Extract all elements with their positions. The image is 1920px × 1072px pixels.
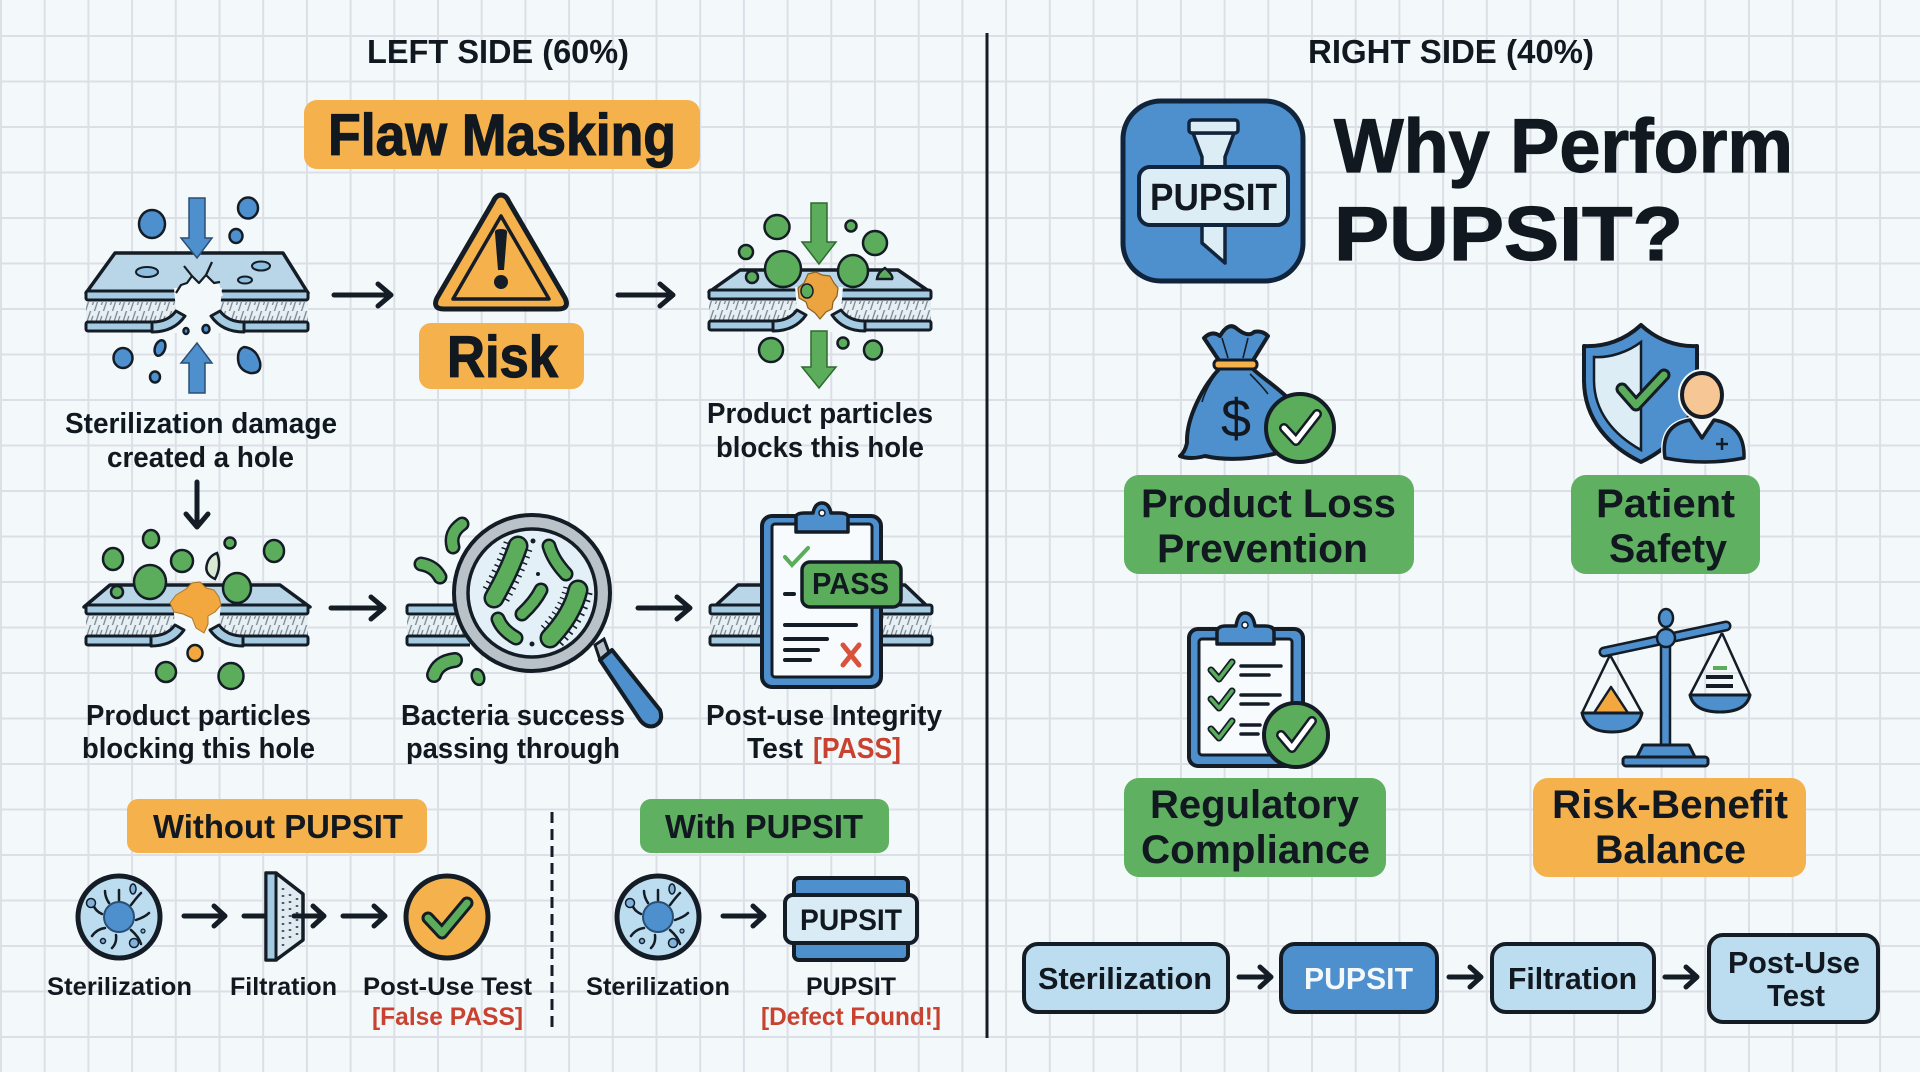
heading: left side: LEFT SIDE (60%)	[367, 33, 629, 70]
arrow: to magnifier	[331, 597, 384, 619]
arrow	[343, 906, 385, 926]
arrow: to risk	[334, 284, 391, 306]
icon: sterilization	[617, 876, 699, 958]
icon: magnifier with bacteria	[407, 515, 661, 726]
badge: With PUPSIT: With PUPSIT	[665, 808, 863, 845]
icon: compliance clipboard	[1189, 613, 1328, 767]
step: PUPSIT: PUPSIT	[1304, 961, 1413, 996]
label: product particles blocks	[707, 398, 933, 464]
arrow	[1665, 967, 1697, 987]
badge: Risk-Benefit Balance: Balance	[1595, 828, 1746, 872]
icon: warning triangle	[436, 195, 566, 309]
label: sterilization: Sterilization	[47, 973, 192, 1001]
icon: clipboard with PASS stamp	[710, 503, 932, 687]
step: PUPSIT	[1281, 944, 1437, 1012]
vertical divider	[986, 33, 988, 1038]
badge: Regulatory Compliance: Compliance	[1141, 828, 1370, 872]
label: product particles blocking	[82, 700, 315, 765]
badge: Regulatory Compliance: Regulatory	[1150, 783, 1360, 827]
panel: with PUPSIT	[586, 799, 941, 1031]
label: filtration: Filtration	[230, 973, 337, 1001]
dashed divider	[550, 812, 554, 1028]
title: Why Perform	[1334, 104, 1793, 189]
label: PUPSIT: PUPSIT	[806, 973, 896, 1001]
label: product particles blocking: Product particles	[86, 700, 311, 732]
step: filtration	[1492, 944, 1654, 1012]
panel: flaw masking	[65, 100, 942, 765]
icon: PUPSIT filter	[785, 878, 917, 960]
badge: Without PUPSIT: Without PUPSIT	[153, 808, 403, 845]
label: sterilization damage: Sterilization damage	[65, 408, 337, 440]
heading: right side: RIGHT SIDE (40%)	[1308, 33, 1594, 70]
title: PUPSIT?	[1334, 192, 1683, 277]
panel: without PUPSIT	[47, 799, 533, 1031]
badge: Risk: Risk	[447, 325, 559, 390]
badge: Risk-Benefit Balance	[1533, 778, 1806, 877]
label: sterilization: Sterilization	[586, 973, 730, 1001]
step: sterilization	[1024, 944, 1228, 1012]
flow: process sequence	[1024, 935, 1878, 1022]
badge: Risk-Benefit Balance: Risk-Benefit	[1552, 783, 1788, 827]
icon: particles blocking hole	[84, 530, 310, 689]
arrow	[1239, 967, 1271, 987]
badge: Product Loss Prevention: Prevention	[1157, 527, 1368, 571]
badge: With PUPSIT	[640, 799, 889, 853]
label: false pass: [False PASS]	[372, 1003, 523, 1031]
arrow: to test	[638, 597, 690, 619]
icon: balance scale	[1582, 609, 1750, 766]
arrow	[723, 906, 764, 926]
step: post-use test: Test	[1767, 978, 1825, 1013]
step: sterilization: Sterilization	[1038, 961, 1212, 996]
badge: Product Loss Prevention: Product Loss	[1141, 482, 1396, 526]
icon: PUPSIT nail badge	[1123, 101, 1303, 281]
arrow	[1449, 967, 1481, 987]
icon: false pass check	[406, 876, 488, 958]
badge: Patient Safety	[1571, 475, 1760, 574]
label: post-use integrity test: Post-use Integrity	[706, 700, 942, 732]
badge: Without PUPSIT	[127, 799, 427, 853]
icon: damaged membrane with a hole	[86, 198, 308, 393]
icon: shield with patient	[1584, 325, 1747, 465]
label: sterilization damage: created a hole	[107, 442, 294, 474]
label: bacteria passing: passing through	[406, 733, 620, 765]
step: post-use test: Post-Use	[1728, 945, 1860, 980]
icon: sterilization	[78, 876, 160, 958]
title	[1334, 104, 1793, 277]
badge: Regulatory Compliance	[1124, 778, 1386, 877]
arrow: to blocked hole	[618, 284, 673, 306]
icon: clipboard with PASS stamp: PASS	[812, 566, 889, 601]
label: product particles blocking: blocking this hole	[82, 733, 315, 765]
icon: PUPSIT nail badge: PUPSIT	[1150, 177, 1277, 219]
icon: product particles block the hole	[709, 203, 931, 388]
icon: PUPSIT filter: PUPSIT	[800, 904, 902, 937]
label: bacteria passing: Bacteria success	[401, 700, 625, 732]
label: defect found: [Defect Found!]	[761, 1003, 941, 1031]
label: post-use integrity test: [PASS]	[813, 733, 901, 765]
badge: Product Loss Prevention	[1124, 475, 1414, 574]
label: post-use integrity test: Test	[747, 733, 803, 765]
label: product particles blocks: Product particles	[707, 398, 933, 430]
badge: Flaw Masking: Flaw Masking	[328, 103, 676, 168]
panel: why perform PUPSIT	[1024, 101, 1878, 1022]
icon: filter	[244, 873, 324, 960]
icon: money bag: $	[1221, 389, 1251, 449]
step: post-use test	[1709, 935, 1878, 1022]
badge: Patient Safety: Safety	[1609, 527, 1728, 571]
label: bacteria passing	[401, 700, 625, 765]
label: sterilization damage	[65, 408, 337, 474]
icon: money bag	[1180, 326, 1334, 462]
step: filtration: Filtration	[1508, 961, 1637, 996]
label: product particles blocks: blocks this hole	[716, 432, 924, 464]
label: post-use test: Post-Use Test	[363, 973, 533, 1001]
arrow	[184, 906, 225, 926]
arrow: down to second row	[186, 482, 208, 527]
label: post-use integrity test	[706, 700, 942, 765]
badge: Patient Safety: Patient	[1596, 482, 1735, 526]
